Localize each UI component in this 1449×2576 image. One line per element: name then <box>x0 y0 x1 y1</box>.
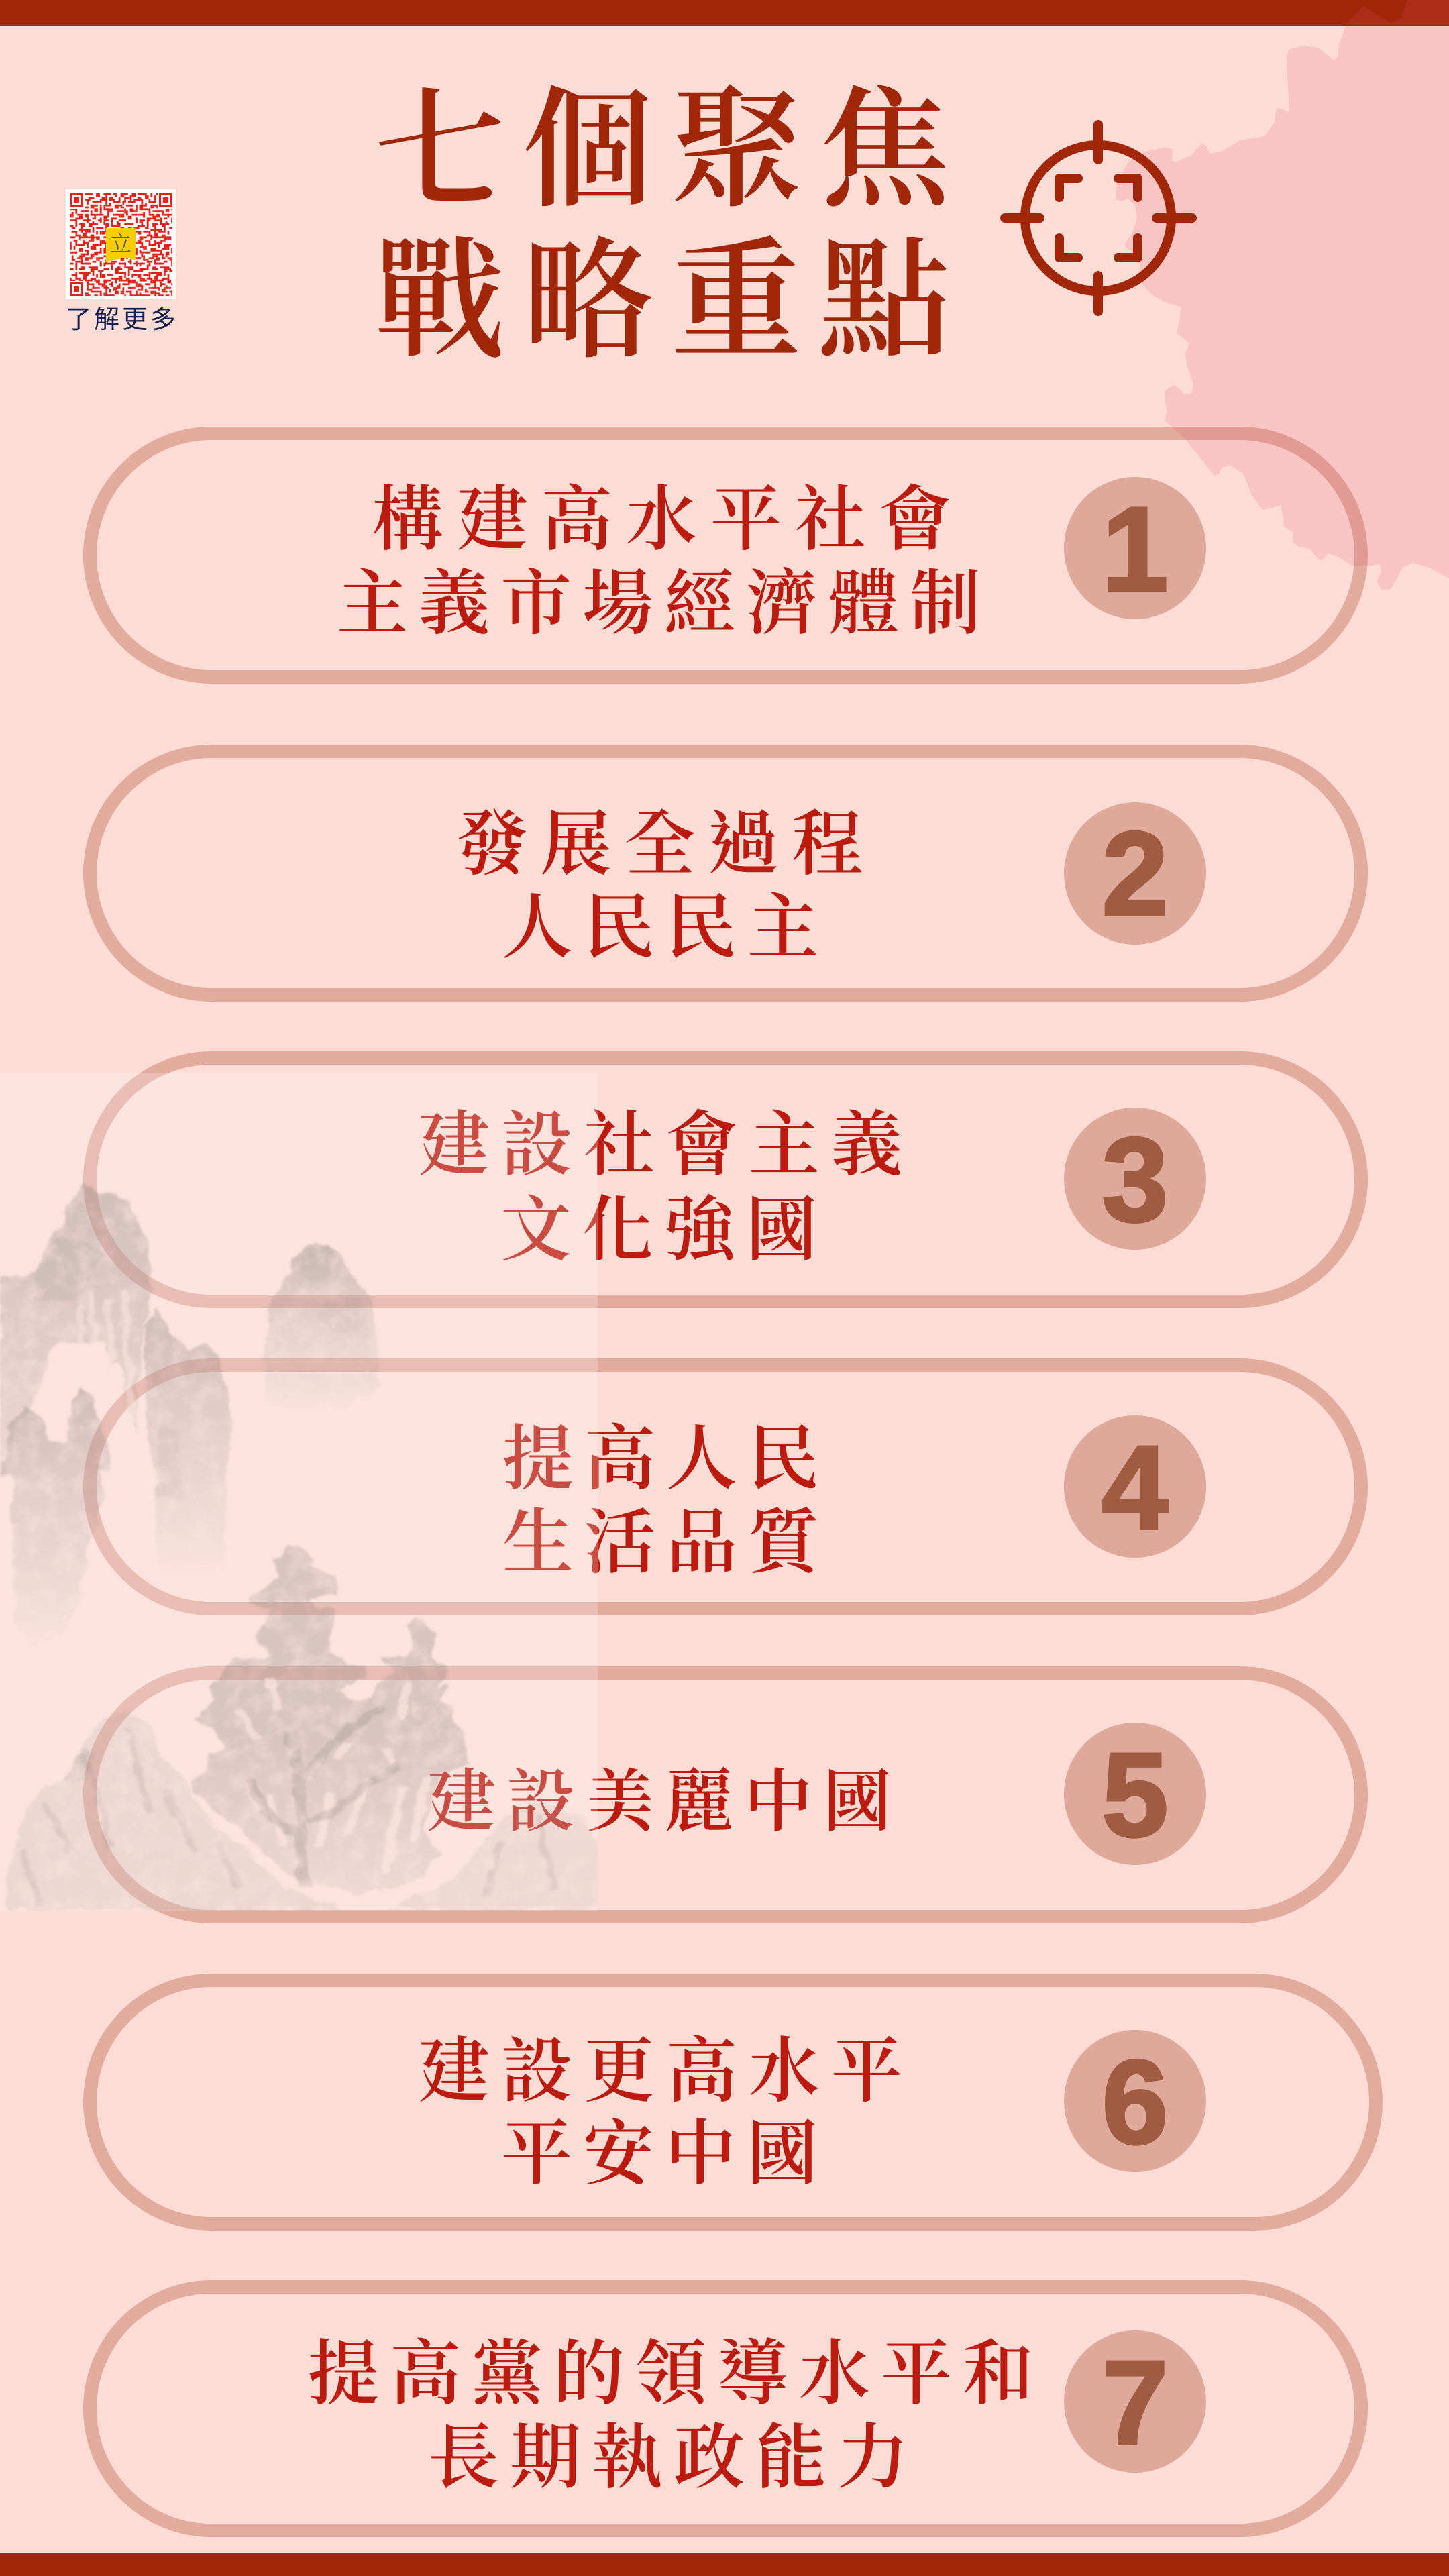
number badge: 1 <box>1102 482 1169 616</box>
number badge: 6 <box>1102 2035 1169 2169</box>
number badge <box>1064 2330 1206 2473</box>
item text <box>502 1420 830 1582</box>
item text: 平安中國 <box>501 2115 828 2194</box>
number badge <box>1064 1723 1206 1865</box>
bottom bar <box>0 2553 1449 2576</box>
number badge <box>1064 802 1206 945</box>
title: 七個聚焦 <box>374 79 967 224</box>
item text <box>308 2335 1044 2498</box>
item text: 主義市場經濟體制 <box>337 565 991 643</box>
landscape overlay <box>0 1073 604 1911</box>
pill outline <box>90 1365 1361 1609</box>
number badge <box>1064 1415 1206 1558</box>
pill outline <box>90 2287 1361 2530</box>
item 6 <box>90 1980 1376 2224</box>
ink tree and rocks <box>7 1548 604 1911</box>
qr code <box>66 189 176 299</box>
item text <box>456 806 876 967</box>
pill outline <box>90 1673 1361 1917</box>
item 2 <box>90 751 1361 995</box>
item text: 文化強國 <box>500 1191 828 1270</box>
item text: 提高人民 <box>502 1420 830 1499</box>
item text: 建設社會主義 <box>419 1106 914 1185</box>
item text: 提高黨的領導水平和 <box>308 2335 1044 2414</box>
number badge: 7 <box>1102 2336 1169 2469</box>
item text <box>337 481 991 643</box>
title: 戰略重點 <box>374 230 967 375</box>
qr code: 立 <box>110 231 131 256</box>
pill outline <box>90 751 1361 995</box>
item text: 發展全過程 <box>456 806 876 884</box>
number badge <box>1064 1108 1206 1250</box>
title <box>374 79 967 375</box>
item 7 <box>90 2287 1361 2530</box>
item text: 構建高水平社會 <box>372 481 964 559</box>
pill outline <box>90 433 1361 677</box>
pill outline <box>90 1980 1376 2224</box>
qr caption: 了解更多 <box>66 306 178 334</box>
icon: target crosshair <box>1005 125 1192 311</box>
item 5 <box>90 1673 1361 1917</box>
number badge <box>1064 2030 1206 2172</box>
qr code block <box>66 189 178 334</box>
item text: 長期執政能力 <box>428 2419 919 2498</box>
item text: 建設美麗中國 <box>427 1765 902 1841</box>
top bar <box>0 0 1449 26</box>
number badge: 5 <box>1102 1728 1169 1862</box>
watercolor splash <box>1116 0 1449 590</box>
number badge <box>1064 477 1206 619</box>
item 1 <box>90 433 1361 677</box>
item text: 人民民主 <box>502 889 829 967</box>
pill outline <box>90 1058 1361 1301</box>
number badge: 3 <box>1102 1113 1169 1246</box>
item text <box>419 1106 914 1270</box>
item text: 生活品質 <box>502 1504 830 1582</box>
number badge: 4 <box>1102 1421 1169 1554</box>
item text: 建設更高水平 <box>419 2033 914 2111</box>
item 4 <box>90 1365 1361 1609</box>
item text <box>419 2033 914 2194</box>
pale panel <box>0 1073 598 1911</box>
ink mountains <box>0 1186 380 1648</box>
item 3 <box>90 1058 1361 1301</box>
number badge: 2 <box>1102 807 1169 941</box>
